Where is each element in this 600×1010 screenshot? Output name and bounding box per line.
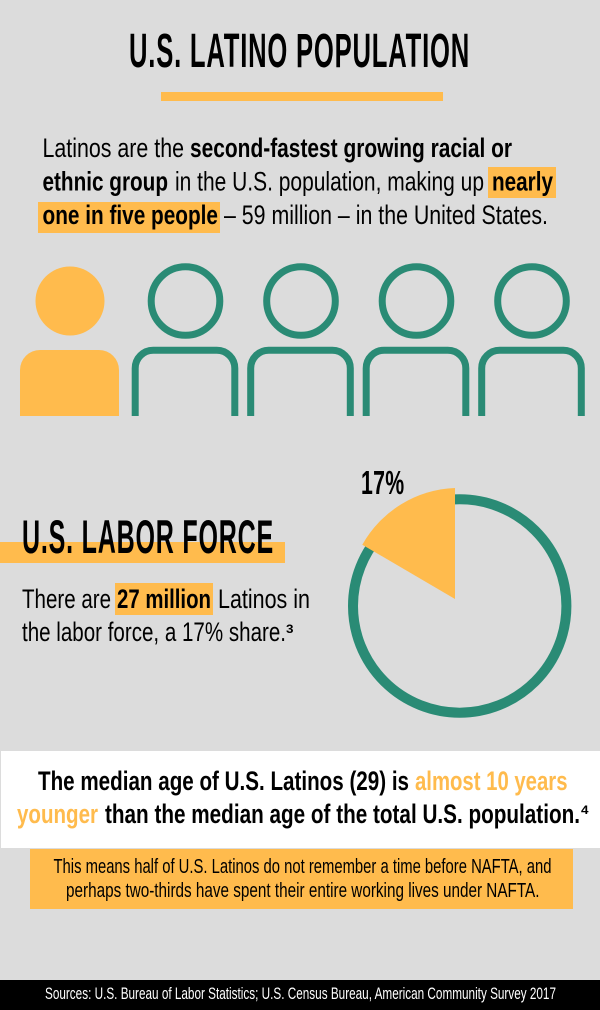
intro paragraph: ethnic group <box>42 166 168 196</box>
intro paragraph: nearly <box>492 166 553 196</box>
median age callout: younger <box>17 799 98 829</box>
sources footer <box>0 980 600 1010</box>
icon: person outline 4 <box>482 267 581 416</box>
NAFTA note <box>30 849 573 909</box>
labor force heading with bar <box>0 510 285 563</box>
ring <box>353 499 566 713</box>
pie label: 17% <box>361 464 404 501</box>
labor force text: There are <box>22 584 111 614</box>
labor force heading with bar: U.S. LABOR FORCE <box>22 510 274 563</box>
pie chart: 17% share <box>353 464 566 713</box>
median age callout: 4 <box>581 803 589 817</box>
labor force text <box>22 583 310 647</box>
icon: person outline 1 <box>135 267 235 416</box>
intro paragraph: one in five people <box>42 200 218 230</box>
labor force text: 3 <box>286 622 294 636</box>
intro paragraph: Latinos are the <box>42 133 184 163</box>
icon row: one in five people <box>20 266 581 416</box>
labor force text: the labor force, a 17% share. <box>22 617 286 647</box>
median age callout: The median age of U.S. Latinos (29) is <box>38 766 409 796</box>
labor force text: Latinos in <box>218 584 310 614</box>
icon: person outline 2 <box>251 267 350 416</box>
title underline bar <box>161 92 443 101</box>
median age callout <box>1 751 600 848</box>
intro paragraph: second-fastest growing racial or <box>190 133 512 163</box>
pie wedge <box>362 488 455 599</box>
intro paragraph <box>38 133 556 233</box>
icon: highlighted person <box>20 266 119 416</box>
icon: person outline 3 <box>366 267 466 416</box>
intro paragraph: in the U.S. population, making up <box>175 166 484 196</box>
labor force text: 27 million <box>117 584 211 614</box>
